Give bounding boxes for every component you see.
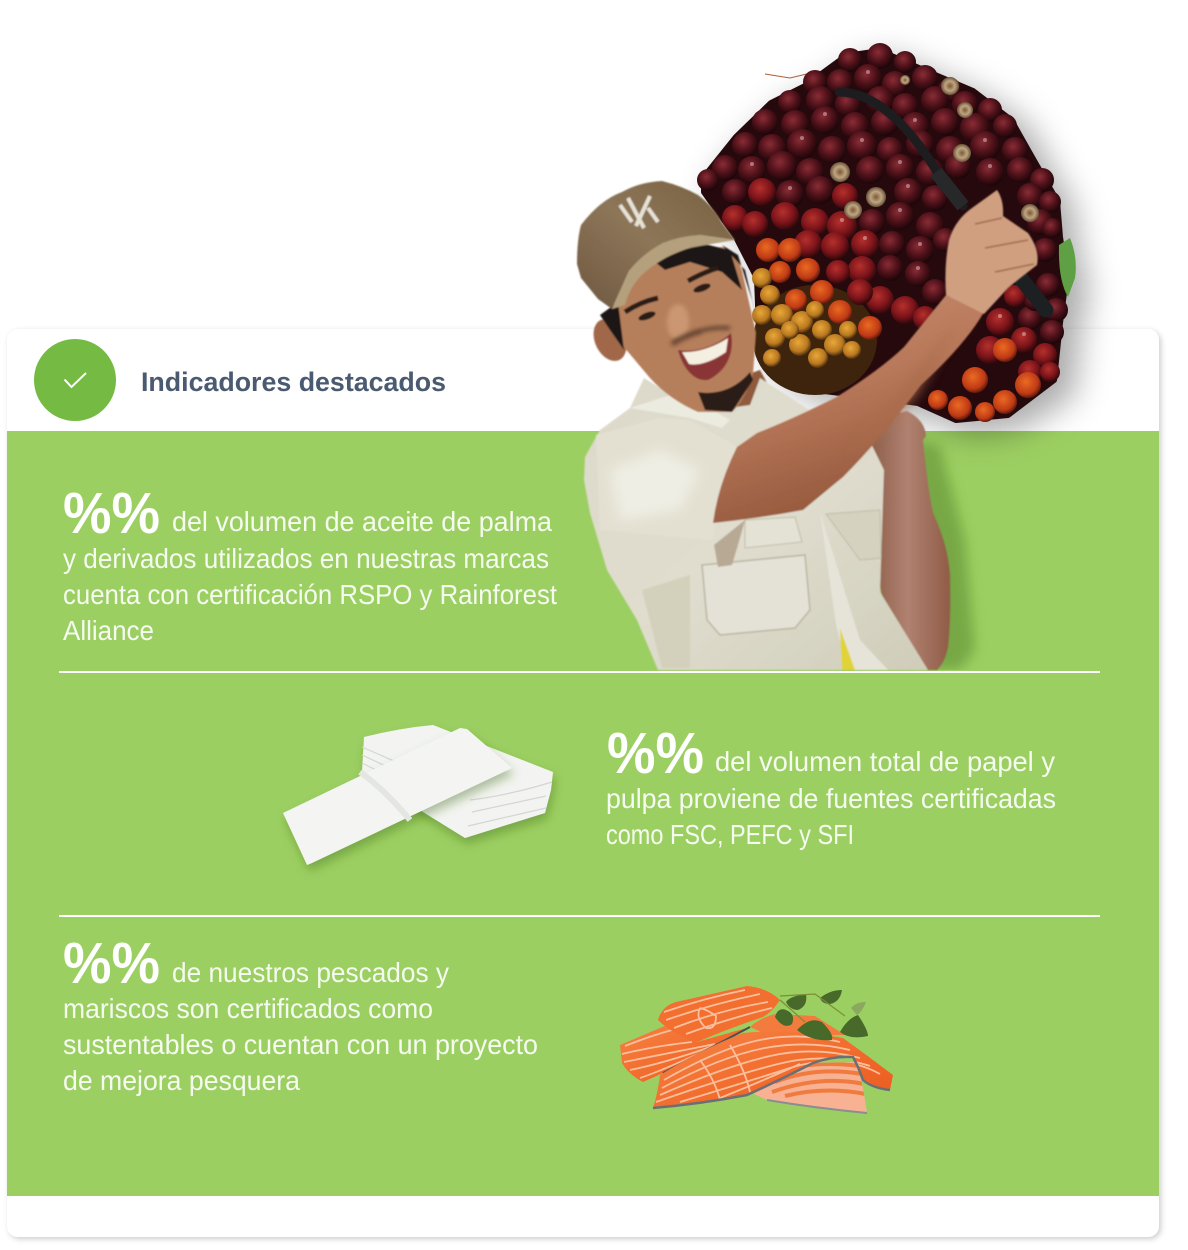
cap logo	[620, 196, 658, 228]
text block: paper indicator: %%	[607, 721, 704, 786]
sickle handle	[839, 92, 963, 206]
cap	[577, 181, 735, 309]
left fillet	[620, 1026, 746, 1082]
text block: palm oil indicator: y derivados utilizados en nuestras marcas	[63, 543, 549, 574]
herb leaves	[775, 990, 868, 1040]
text block: paper indicator: del volumen total de papel y	[715, 746, 1055, 777]
bottom fillet	[753, 1062, 867, 1112]
mouth	[678, 333, 732, 380]
text block: seafood indicator: de nuestros pescados y	[172, 957, 449, 988]
text block: seafood indicator: de mejora pesquera	[63, 1065, 300, 1096]
heading: Indicadores destacados	[141, 367, 446, 397]
eyes and brows	[688, 268, 718, 281]
text block: seafood indicator	[63, 931, 538, 1096]
text block: palm oil indicator: %%	[63, 481, 160, 546]
text block: seafood indicator: %%	[63, 931, 160, 996]
nose shading	[667, 304, 689, 340]
forearm cast shadow on green	[915, 440, 975, 670]
panel background card	[7, 329, 1159, 1237]
bunch base	[704, 51, 1066, 420]
text block: paper indicator: pulpa proviene de fuentes certificadas	[606, 783, 1056, 814]
palm fruit bunch	[697, 43, 1089, 436]
icon: green check badge	[34, 339, 116, 421]
top fillet	[658, 986, 780, 1042]
text block: palm oil indicator: del volumen de aceite de palma	[172, 506, 552, 537]
text block: palm oil indicator: cuenta con certificación RSPO y Rainforest	[63, 579, 557, 610]
image: salmon fillets with herb	[615, 984, 895, 1115]
panel: indicadores destacados	[7, 329, 1159, 1237]
man body	[577, 181, 1038, 670]
head with cap and smile	[577, 181, 760, 412]
moustache and goatee	[672, 328, 730, 343]
main fillet	[653, 1032, 893, 1107]
main raised arm	[713, 295, 984, 523]
panel: green content area	[7, 431, 1159, 1196]
raised back forearm	[856, 411, 950, 670]
image: paper tissue stack	[283, 725, 553, 865]
text block: paper indicator: como FSC, PEFC y SFI	[606, 819, 854, 850]
face	[615, 247, 756, 412]
neck and inner collar	[690, 370, 790, 440]
bunch cast shadow	[712, 57, 1089, 436]
text block: palm oil indicator	[63, 481, 557, 646]
shirt	[584, 378, 928, 670]
text block: paper indicator	[606, 721, 1056, 850]
back fillet	[750, 1014, 845, 1036]
hand gripping handle	[945, 190, 1038, 314]
ear	[587, 314, 633, 366]
text block: seafood indicator: mariscos son certificados como	[63, 993, 433, 1024]
text block: seafood indicator: sustentables o cuentan con un proyecto	[63, 1029, 538, 1060]
text block: palm oil indicator: Alliance	[63, 615, 154, 646]
photo: worker carrying palm fruit bunch	[577, 43, 1089, 670]
